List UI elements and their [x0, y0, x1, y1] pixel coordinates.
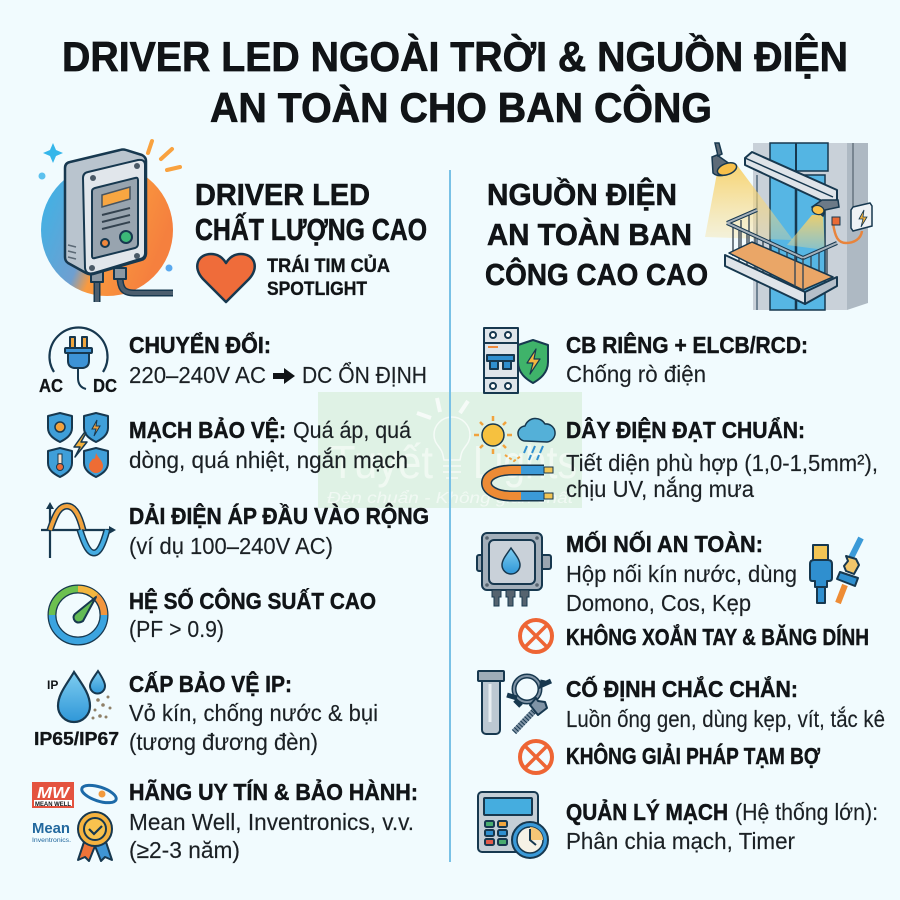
panel: item dải điện áp	[41, 501, 429, 559]
text	[129, 331, 427, 388]
text: MẠCH BẢO VỆ:	[129, 415, 286, 443]
panel: item mối nối	[477, 530, 869, 652]
text: HỆ SỐ CÔNG SUẤT CAO	[129, 587, 376, 614]
panel: item dây điện	[474, 416, 878, 502]
text	[566, 530, 797, 616]
icon: control panel and timer	[478, 792, 548, 858]
text	[129, 587, 376, 642]
icon: sine wave	[41, 502, 116, 558]
panel: item chuyển đổi	[39, 327, 427, 396]
title: DRIVER LED NGOÀI TRỜI & NGUỒN ĐIỆN	[62, 32, 848, 80]
column divider	[449, 170, 451, 862]
panel: item CB riêng	[484, 328, 808, 393]
text: DC ỔN ĐỊNH	[302, 361, 427, 388]
icon: brand logos and badge	[32, 782, 118, 861]
icon: AC/DC plug: AC	[39, 376, 63, 396]
text: KHÔNG GIẢI PHÁP TẠM BỢ	[566, 741, 820, 769]
text: dòng, quá nhiệt, ngắn mạch	[129, 447, 408, 473]
text: (tương đương đèn)	[129, 729, 318, 755]
icon: AC/DC plug	[39, 327, 117, 396]
subheading	[267, 253, 390, 300]
text: Tiết diện phù hợp (1,0-1,5mm²),	[566, 450, 878, 476]
heading: DRIVER LED	[195, 177, 370, 212]
text	[129, 777, 418, 863]
text: Mean Well, Inventronics, v.v.	[129, 809, 414, 835]
icon: driver box	[38, 141, 180, 302]
text: CẤP BẢO VỆ IP:	[129, 669, 292, 697]
icon: water drops: IP65/IP67	[34, 729, 119, 749]
panel: item cấp bảo vệ IP	[34, 669, 378, 755]
icon: water drops: IP	[47, 678, 58, 692]
text: (PF > 0.9)	[129, 616, 224, 642]
text: (ví dụ 100–240V AC)	[129, 533, 333, 559]
text: Quá áp, quá	[293, 417, 411, 443]
text: Phân chia mạch, Timer	[566, 828, 795, 854]
text: MỐI NỐI AN TOÀN:	[566, 530, 763, 557]
heading: NGUỒN ĐIỆN	[487, 176, 677, 212]
subheading: TRÁI TIM CỦA	[267, 253, 390, 277]
watermark: Đèn chuẩn - Không gian chất	[327, 489, 574, 507]
text: QUẢN LÝ MẠCH	[566, 797, 728, 825]
icon: junction box	[477, 533, 551, 606]
watermark	[318, 392, 582, 508]
warning	[520, 620, 869, 652]
icon: brand logos and badge: Mean	[32, 820, 70, 837]
text: CB RIÊNG + ELCB/RCD:	[566, 331, 808, 358]
icon: sun, rain and cable	[474, 416, 555, 499]
title: AN TOÀN CHO BAN CÔNG	[210, 83, 712, 131]
panel: item mạch bảo vệ	[48, 413, 411, 477]
icon: brand logos and badge: MEAN WELL	[35, 802, 71, 808]
text: DÂY ĐIỆN ĐẠT CHUẨN:	[566, 416, 805, 443]
text	[129, 501, 429, 559]
text	[566, 797, 878, 854]
icon: prohibited	[520, 741, 552, 773]
text	[566, 416, 878, 502]
heading	[485, 176, 708, 292]
warning	[520, 741, 820, 773]
panel: item hãng uy tín	[32, 777, 418, 863]
text: (≥2-3 năm)	[129, 837, 240, 863]
icon: protection shields	[48, 413, 108, 477]
watermark: Tuyết	[330, 436, 433, 488]
text: CỐ ĐỊNH CHẮC CHẮN:	[566, 675, 798, 702]
icon: prohibited	[520, 620, 552, 652]
text: CHUYỂN ĐỔI:	[129, 331, 271, 358]
panel: nguồn điện	[485, 143, 872, 310]
panel: driver LED	[38, 141, 427, 302]
icon: balcony illustration	[705, 143, 872, 310]
title	[62, 32, 848, 131]
heading: AN TOÀN BAN	[487, 217, 692, 252]
panel: item hệ số công suất	[52, 587, 376, 642]
icon: water drops	[34, 671, 119, 749]
text	[129, 669, 378, 755]
heading: CHẤT LƯỢNG CAO	[195, 212, 427, 247]
icon: gauge	[52, 589, 104, 641]
text	[129, 415, 411, 473]
panel: item quản lý mạch	[478, 792, 878, 858]
text	[566, 675, 885, 732]
icon: conduit, clamp and screw	[478, 671, 551, 734]
heading	[195, 177, 427, 247]
text: 220–240V AC	[129, 362, 266, 388]
text: DẢI ĐIỆN ÁP ĐẦU VÀO RỘNG	[129, 501, 429, 529]
icon: brand logos and badge: Inventronics.	[32, 838, 71, 844]
text	[566, 331, 808, 387]
text: (Hệ thống lớn):	[735, 799, 878, 825]
text: chịu UV, nắng mưa	[566, 476, 754, 502]
heading: CÔNG CAO CAO	[485, 256, 708, 292]
icon: AC/DC plug: DC	[93, 376, 117, 396]
text: Chống rò điện	[566, 361, 706, 387]
panel: item cố định	[478, 671, 885, 773]
icon: brand logos and badge: MW	[37, 785, 71, 802]
text: Vỏ kín, chống nước & bụi	[129, 700, 378, 726]
text: Domono, Cos, Kẹp	[566, 590, 751, 616]
subheading: SPOTLIGHT	[267, 278, 367, 300]
icon: heart	[197, 254, 255, 302]
watermark: Lights	[473, 436, 577, 488]
icon: connectors	[810, 538, 861, 603]
text: Hộp nối kín nước, dùng	[566, 561, 797, 587]
text: HÃNG UY TÍN & BẢO HÀNH:	[129, 777, 418, 805]
icon: circuit breaker and shield	[484, 328, 548, 393]
